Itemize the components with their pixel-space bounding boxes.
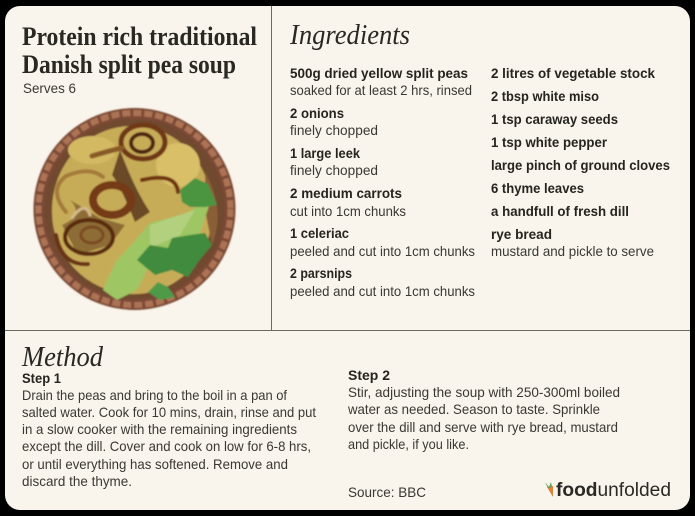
ingredient list, first column: 1 celeriac (290, 225, 349, 241)
bowl (34, 108, 236, 310)
method step 1: or until everything has softened. Remove and (22, 456, 288, 472)
method step 1: salted water. Cook for 10 mins, drain, rinse and put (22, 404, 316, 420)
ingredient list, second column: 2 tbsp white miso (491, 88, 599, 104)
ingredient list, first column: 2 onions (290, 105, 344, 121)
ingredient list, first column: peeled and cut into 1cm chunks (290, 243, 475, 259)
method step 2: Stir, adjusting the soup with 250-300ml boiled (348, 384, 620, 400)
ingredient list, first column: 1 large leek (290, 145, 360, 161)
heading: method: Method (21, 341, 103, 373)
ingredient list, first column: soaked for at least 2 hrs, rinsed (290, 82, 472, 98)
ingredient list, second column: 2 litres of vegetable stock (491, 65, 655, 81)
title: Protein rich traditional (22, 22, 257, 51)
method step 2 (347, 367, 620, 452)
servings: Serves 6 (23, 80, 76, 96)
ingredient list, second column: 6 thyme leaves (491, 180, 584, 196)
method step 2: Step 2 (348, 367, 390, 383)
ingredient list, second column (491, 65, 670, 259)
ingredient list, first column: 2 parsnips (290, 265, 352, 281)
method step 1 (22, 370, 316, 489)
method step 1: Step 1 (22, 370, 61, 386)
source: Source: BBC (348, 484, 426, 500)
logo: foodunfolded: foodunfolded (556, 480, 671, 501)
method step 2: water as needed. Season to taste. Sprinkle (347, 401, 600, 417)
method step 1: except the dill. Cover and cook on low for 6-8 hrs, (22, 438, 311, 454)
ingredient list, first column: peeled and cut into 1cm chunks (290, 283, 475, 299)
ingredient list, second column: 1 tsp caraway seeds (491, 111, 618, 127)
method step 1: Drain the peas and bring to the boil in a pan of (22, 387, 287, 403)
ingredient list, second column: mustard and pickle to serve (491, 243, 654, 259)
heading: ingredients: Ingredients (289, 19, 410, 51)
title: Danish split pea soup (22, 50, 236, 79)
ingredient list, first column: cut into 1cm chunks (290, 203, 406, 219)
lettuce (103, 197, 212, 300)
illustration: bowl of split pea soup (34, 108, 236, 310)
ingredient list, first column: 2 medium carrots (290, 185, 402, 201)
icon: carrot (545, 482, 553, 497)
fried onions (56, 125, 178, 264)
ingredient list, first column (290, 65, 475, 299)
ingredient list, second column: rye bread (491, 226, 552, 242)
method step 1: in a slow cooker with the remaining ingredients (22, 421, 297, 437)
coriander leaves (137, 178, 217, 300)
ingredient list, first column: finely chopped (290, 122, 378, 138)
method step 2: over the dill and serve with rye bread, mustard (348, 419, 618, 435)
ingredient list, second column: a handfull of fresh dill (491, 203, 629, 219)
ingredient list, first column: 500g dried yellow split peas (290, 65, 468, 81)
ingredient list, second column: large pinch of ground cloves (491, 157, 670, 173)
method step 1: discard the thyme. (22, 473, 132, 489)
title (22, 22, 257, 79)
ingredient list, second column: 1 tsp white pepper (491, 134, 608, 150)
ingredient list, first column: finely chopped (290, 162, 378, 178)
method step 2: and pickle, if you like. (348, 436, 469, 452)
